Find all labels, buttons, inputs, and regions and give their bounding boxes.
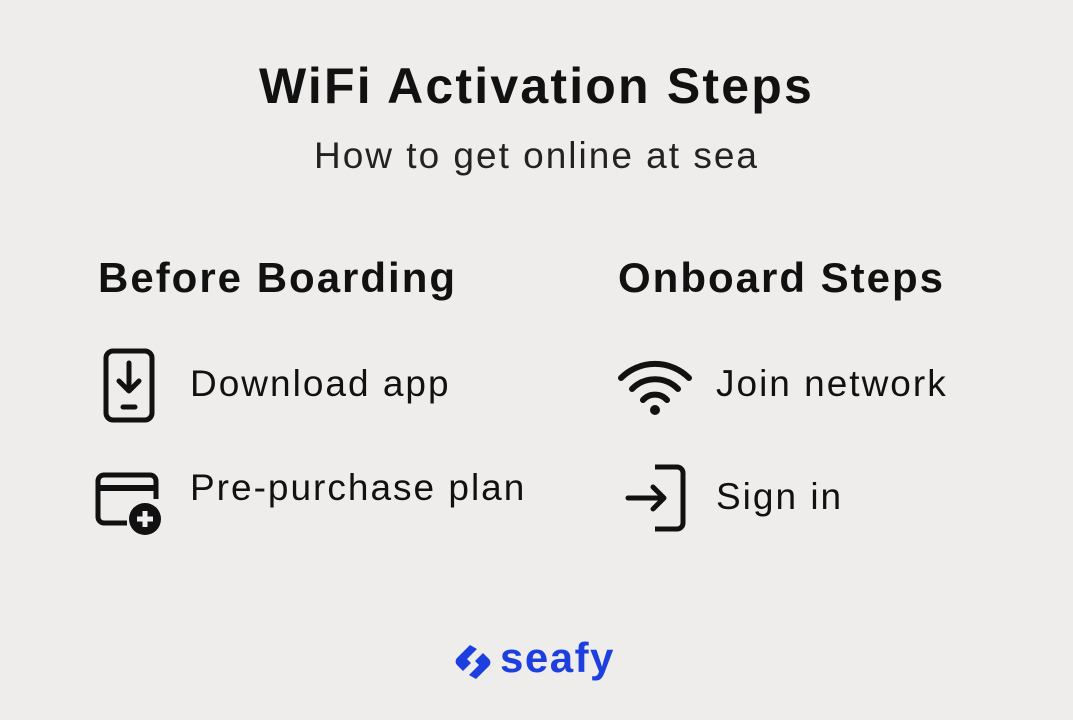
title: WiFi Activation Steps (259, 58, 814, 114)
icon: sign in (626, 464, 686, 532)
text: sign in: Sign in (716, 476, 843, 517)
text: join network: Join network (716, 363, 948, 404)
icon: card plus (96, 472, 161, 535)
heading: before boarding: Before Boarding (98, 254, 457, 301)
icon: wifi (618, 360, 692, 415)
panel: before boarding (96, 254, 526, 535)
subtitle: How to get online at sea (314, 135, 759, 176)
text: pre-purchase plan: Pre-purchase plan (190, 467, 526, 508)
logo: seafy (456, 634, 615, 681)
panel: onboard steps (618, 254, 948, 532)
heading: onboard steps: Onboard Steps (618, 254, 945, 301)
text: seafy: seafy (500, 634, 615, 681)
icon: logo mark (456, 645, 490, 679)
text: download app: Download app (190, 363, 451, 404)
icon: phone download (104, 348, 154, 422)
